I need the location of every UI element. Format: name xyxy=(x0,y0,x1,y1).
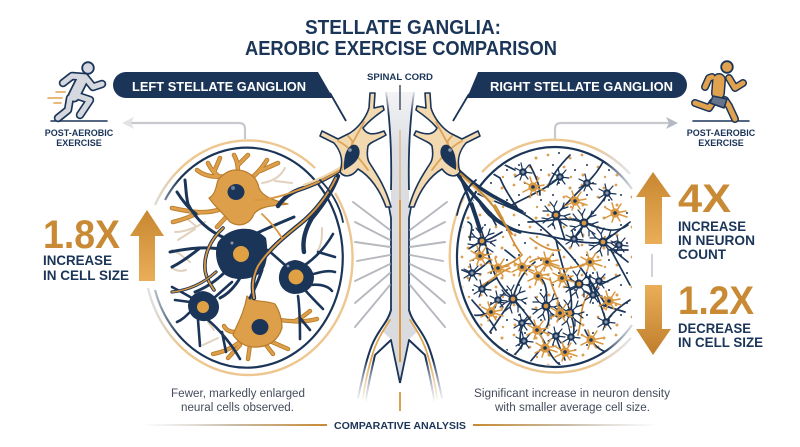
label: left stellate ganglion xyxy=(113,72,346,121)
rays around the spinal cord xyxy=(353,202,447,327)
neuron: orange, lower xyxy=(213,296,317,359)
stat: 4x increase in neuron count: COUNT xyxy=(678,246,726,262)
ganglion: right xyxy=(409,93,480,207)
text: post-aerobic exercise, left xyxy=(45,128,114,148)
panel: right ganglion circle xyxy=(450,140,635,373)
orange dendrites xyxy=(481,205,590,335)
arrow: left circle to left runner xyxy=(122,117,245,139)
text: post-aerobic exercise, right xyxy=(687,128,756,148)
title xyxy=(245,16,557,60)
label: left stellate ganglion: LEFT STELLATE GANGLION xyxy=(132,79,306,94)
title: STELLATE GANGLIA: xyxy=(305,16,501,39)
text: post-aerobic exercise, left: EXERCISE xyxy=(56,138,102,148)
text: post-aerobic exercise, right: EXERCISE xyxy=(698,138,744,148)
stat: 1.8x increase in cell size: INCREASE xyxy=(43,252,112,268)
label: spinal cord: SPINAL CORD xyxy=(367,72,434,82)
icon: left runner, gray xyxy=(48,62,107,121)
caption: right xyxy=(474,388,670,414)
arrow: up, right xyxy=(636,172,671,244)
branching navy dendrites xyxy=(462,155,630,365)
stat: 1.8x increase in cell size: 1.8X xyxy=(43,213,120,257)
dense neuron field xyxy=(455,147,635,367)
stat: 1.2x decrease in cell size: 1.2X xyxy=(678,279,754,323)
footer: comparative analysis: COMPARATIVE ANALYSIS xyxy=(334,421,466,432)
icon: right runner, orange xyxy=(693,61,749,121)
title: AEROBIC EXERCISE COMPARISON xyxy=(245,37,557,60)
stat: 1.2x decrease in cell size xyxy=(678,279,763,350)
stat: 4x increase in neuron count: 4X xyxy=(678,177,731,221)
stat: 1.2x decrease in cell size: IN CELL SIZE xyxy=(678,334,763,350)
axon bundle, right xyxy=(456,168,522,234)
stat: 1.8x increase in cell size xyxy=(43,213,129,283)
caption: left: neural cells observed. xyxy=(181,402,294,414)
axon bundle, left xyxy=(172,166,343,298)
neuron: navy, right xyxy=(268,234,335,339)
circle outline, left xyxy=(148,140,353,375)
neuron: orange, upper xyxy=(172,155,288,227)
stat: 4x increase in neuron count xyxy=(678,177,755,262)
label: right stellate ganglion xyxy=(453,72,687,121)
ganglion: left xyxy=(320,93,391,207)
stat: 4x increase in neuron count: IN NEURON xyxy=(678,232,755,248)
text: post-aerobic exercise, left: POST-AEROBIC xyxy=(45,128,114,138)
stat: 4x increase in neuron count: INCREASE xyxy=(678,218,746,234)
spinal cord xyxy=(358,85,442,411)
arrow: down, right xyxy=(636,285,671,355)
divider between right stats xyxy=(651,254,653,277)
neuron: navy, lower left xyxy=(172,282,240,359)
caption: left xyxy=(171,388,305,414)
text: post-aerobic exercise, right: POST-AEROBIC xyxy=(687,128,756,138)
label: right stellate ganglion: RIGHT STELLATE GANGLION xyxy=(490,79,673,94)
caption: right: with smaller average cell size. xyxy=(494,402,650,414)
caption: right: Significant increase in neuron density xyxy=(474,388,670,400)
small neurons, orange xyxy=(470,177,627,361)
arrow: up, left xyxy=(130,210,164,281)
stat: 1.8x increase in cell size: IN CELL SIZE xyxy=(43,267,129,283)
arrow: right circle to right runner xyxy=(555,117,678,139)
small neurons, navy xyxy=(464,163,628,349)
circle outline, right xyxy=(450,140,632,373)
neuron: navy, centre xyxy=(170,180,294,298)
caption: left: Fewer, markedly enlarged xyxy=(171,388,305,400)
panel: left ganglion circle xyxy=(148,140,353,375)
faint background dendrites xyxy=(172,168,322,345)
stat: 1.2x decrease in cell size: DECREASE xyxy=(678,320,751,336)
